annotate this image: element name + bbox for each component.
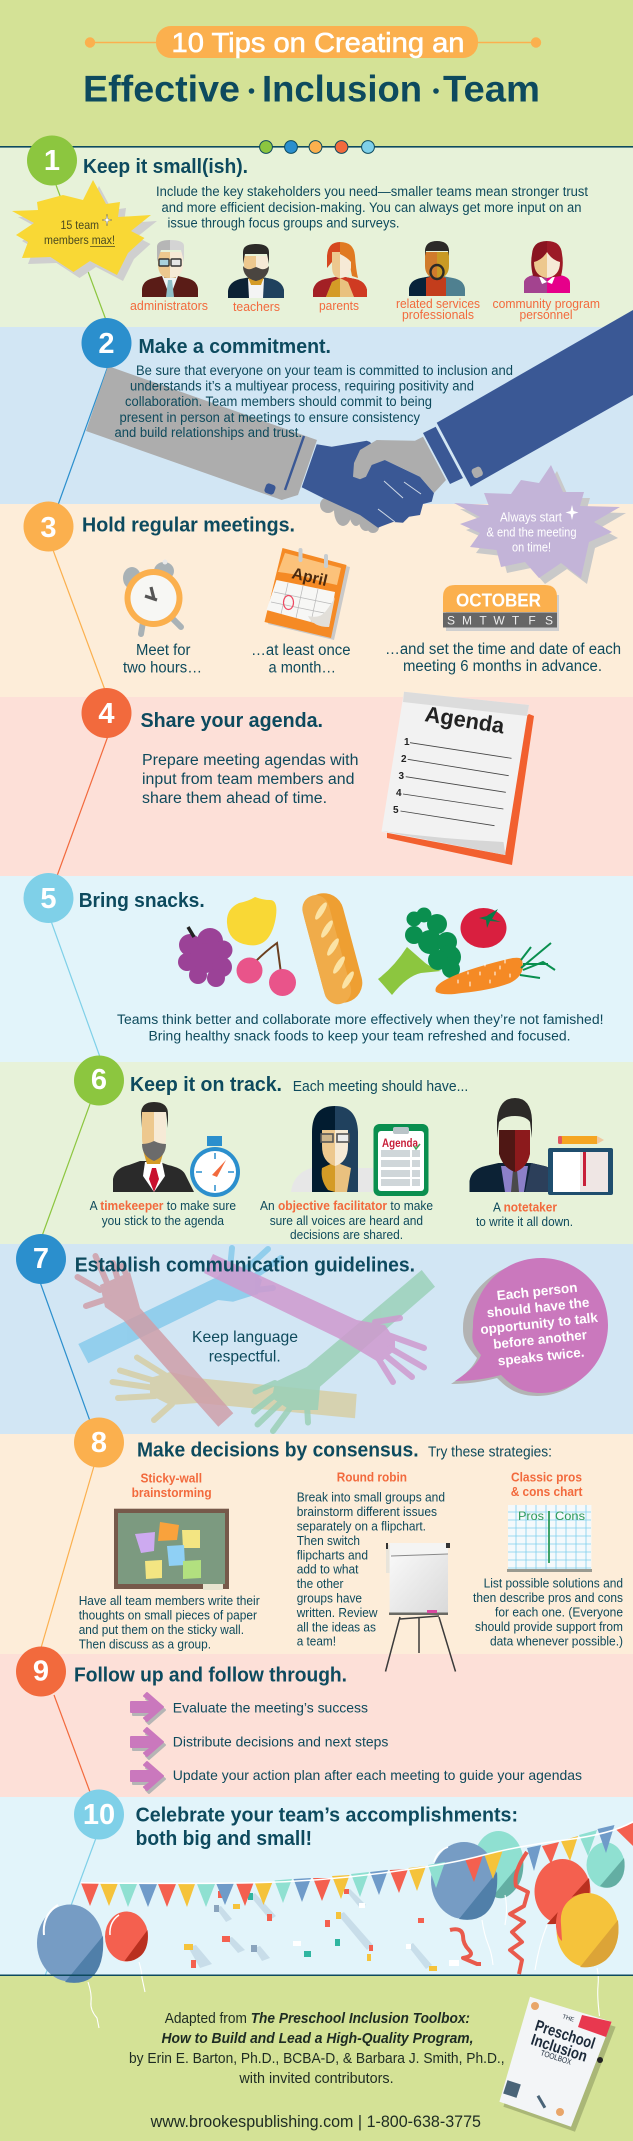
round robin body text: a team! bbox=[297, 1634, 336, 1648]
left red balloon bbox=[105, 1912, 148, 1962]
section 6 captions: you stick to the agenda bbox=[102, 1213, 225, 1228]
starburst callout: 15 team members max: members max! bbox=[44, 233, 115, 247]
big blue balloon bbox=[431, 1842, 497, 1920]
section 6 captions bbox=[90, 1198, 573, 1242]
speech bubble callout bbox=[451, 1258, 608, 1396]
sticky-wall body text: Then discuss as a group. bbox=[79, 1636, 211, 1652]
main title bbox=[83, 68, 540, 110]
strategy headings: Sticky-wall bbox=[140, 1470, 202, 1486]
title banner: 10 Tips on Creating an bbox=[172, 27, 464, 58]
icon: grapes bbox=[178, 927, 232, 987]
starburst callout: always start and end on time: & end the meeting bbox=[486, 524, 576, 540]
arm: purple bbox=[204, 1254, 424, 1382]
numbered circle 4: 4 bbox=[98, 698, 115, 730]
round robin body text: flipcharts and bbox=[297, 1548, 368, 1562]
section 5 background bbox=[0, 876, 633, 1062]
section 7: reaching arms illustration bbox=[78, 1248, 435, 1431]
icon: October calendar strip: T bbox=[512, 614, 520, 628]
round robin body text: brainstorm different issues bbox=[297, 1504, 437, 1519]
section 1: keep it small bbox=[12, 156, 600, 322]
icon: agenda notepad: 1 bbox=[404, 737, 410, 748]
round robin body text: separately on a flipchart. bbox=[297, 1518, 426, 1534]
round robin body text: written. Review bbox=[296, 1605, 378, 1620]
numbered circle 7 bbox=[16, 1234, 66, 1284]
left big blue balloon bbox=[37, 1904, 103, 1983]
numbered circle 6: 6 bbox=[91, 1064, 107, 1096]
strategy headings: Round robin bbox=[337, 1470, 407, 1484]
numbered circle 2 bbox=[82, 318, 132, 368]
footer website and phone: www.brookespublishing.com | 1-800-638-3775 bbox=[150, 2112, 481, 2131]
section 9 background bbox=[0, 1654, 633, 1797]
sticky-wall body text: Have all team members write their bbox=[79, 1593, 260, 1608]
section 5 body text: Teams think better and collaborate more effectively when they’re not famished! bbox=[117, 1012, 604, 1027]
pros and cons body text: should provide support from bbox=[475, 1619, 623, 1634]
starburst callout: 15 team members max: 15 team bbox=[60, 218, 99, 232]
section 10 background bbox=[0, 1797, 633, 1975]
body text 2: and build relationships and trust. bbox=[114, 425, 302, 440]
body text 2: collaboration. Team members should commit to being bbox=[125, 394, 432, 409]
strategy headings: Classic pros bbox=[511, 1470, 582, 1484]
section 8 heading: Try these strategies: bbox=[428, 1444, 552, 1460]
main title: Effective bbox=[83, 68, 240, 110]
gray fingers bbox=[320, 494, 379, 533]
speech bubble callout: opportunity to talk bbox=[480, 1310, 599, 1337]
section 5 body text bbox=[117, 1012, 604, 1044]
gray hand bbox=[353, 437, 446, 493]
book cover: TOOLBOX bbox=[539, 2048, 573, 2067]
left balloon strings bbox=[88, 1962, 145, 2028]
numbered circle 2: 2 bbox=[98, 328, 115, 360]
speech bubble callout: Each person bbox=[496, 1280, 578, 1303]
section 3 captions: Meet for bbox=[136, 642, 190, 659]
numbered circle 8: 8 bbox=[91, 1427, 107, 1459]
section 9 heading: Follow up and follow through. bbox=[74, 1664, 347, 1686]
section 3 captions: a month… bbox=[268, 660, 336, 676]
section 6 captions: An objective facilitator to make bbox=[260, 1198, 433, 1213]
section 4 heading: Share your agenda. bbox=[140, 710, 323, 732]
section 5 body text: Bring healthy snack foods to keep your team refreshed and focused. bbox=[148, 1028, 570, 1044]
strategy headings: brainstorming bbox=[132, 1485, 212, 1500]
arrow list text: Distribute decisions and next steps bbox=[173, 1734, 388, 1750]
section 5 heading: Bring snacks. bbox=[79, 890, 205, 912]
book cover: Preschool bbox=[533, 2018, 597, 2053]
footer citation text: How to Build and Lead a High-Quality Program, bbox=[162, 2030, 474, 2047]
arm: pink-red bbox=[78, 1256, 233, 1427]
pros and cons body text bbox=[473, 1576, 623, 1648]
icon: October calendar strip: S bbox=[545, 614, 553, 628]
icon: sticky-note board bbox=[114, 1509, 229, 1590]
numbered circle 5: 5 bbox=[40, 883, 57, 915]
body text 2: understands it’s a multiyear process, requiring positivity and bbox=[130, 378, 474, 394]
section 3 captions: two hours… bbox=[123, 660, 202, 676]
icon: pros and cons grid: Pros bbox=[518, 1509, 544, 1523]
icon: pros and cons grid: Cons bbox=[555, 1509, 585, 1523]
numbered circle 3: 3 bbox=[40, 512, 57, 544]
balloons right cluster bbox=[431, 1831, 625, 2016]
icon: community program personnel bbox=[524, 241, 570, 293]
icon: agenda notepad: Agenda bbox=[423, 701, 507, 739]
arrow list text: Evaluate the meeting’s success bbox=[173, 1700, 368, 1716]
role labels: administrators bbox=[130, 299, 208, 313]
icon: October calendar strip: F bbox=[528, 614, 536, 628]
numbered circle 7: 7 bbox=[33, 1243, 49, 1275]
role labels: professionals bbox=[402, 308, 474, 322]
main title: Team bbox=[443, 68, 540, 110]
balloons left pair bbox=[37, 1904, 148, 2028]
numbered circle 10: 10 bbox=[83, 1799, 115, 1831]
sticky-wall body text: and put them on the sticky wall. bbox=[79, 1622, 244, 1637]
section 2: handshake illustration bbox=[86, 310, 633, 533]
numbered circle 1 bbox=[27, 136, 77, 186]
section 10 heading: Celebrate your team’s accomplishments: bbox=[136, 1804, 518, 1826]
section 3 captions: meeting 6 months in advance. bbox=[403, 658, 602, 675]
section 7 body text: Keep language bbox=[192, 1329, 298, 1346]
icon: tomato bbox=[460, 908, 506, 948]
arrow 3 bbox=[131, 1762, 165, 1793]
numbered circle 8 bbox=[74, 1418, 124, 1468]
section 8 heading: Make decisions by consensus. bbox=[137, 1440, 419, 1462]
heading 2: Make a commitment. bbox=[138, 336, 331, 358]
connector lines between numbered circles bbox=[40, 185, 108, 1976]
section 10 heading: both big and small! bbox=[136, 1828, 312, 1850]
body text 1 bbox=[156, 184, 588, 230]
arrow 1 bbox=[131, 1693, 165, 1724]
numbered circle 4 bbox=[82, 688, 132, 738]
pros and cons body text: then describe pros and cons bbox=[473, 1590, 623, 1605]
book cover: Inclusion bbox=[529, 2032, 589, 2066]
numbered circle 6 bbox=[74, 1056, 124, 1106]
mint small balloon bbox=[586, 1842, 625, 1888]
icon: October calendar strip bbox=[443, 585, 559, 631]
section 6 heading: Each meeting should have... bbox=[293, 1079, 468, 1095]
arm: tan bbox=[112, 1358, 357, 1420]
footer citation text: Adapted from The Preschool Inclusion Toolbox: bbox=[165, 2010, 470, 2027]
icon: alarm clock bbox=[123, 560, 182, 634]
icon: teacher bbox=[228, 244, 284, 298]
section 10 heading bbox=[136, 1804, 518, 1850]
icon: April calendar bbox=[264, 548, 350, 640]
bunting string and flags bbox=[81, 1822, 633, 1907]
gray sleeve bbox=[86, 366, 317, 500]
icon: agenda notepad: 2 bbox=[401, 754, 407, 765]
role labels: personnel bbox=[520, 308, 572, 322]
icon: pear bbox=[227, 897, 276, 945]
icon: cherries bbox=[236, 943, 296, 996]
speech bubble callout: should have the bbox=[486, 1295, 591, 1320]
round robin body text bbox=[296, 1490, 445, 1648]
body text 2 bbox=[114, 363, 513, 440]
round robin body text: the other bbox=[297, 1576, 344, 1591]
sticky-wall body text bbox=[79, 1593, 260, 1652]
section 4 body text bbox=[142, 752, 358, 807]
section 7 body text: respectful. bbox=[209, 1348, 281, 1366]
sticky-wall body text: thoughts on small pieces of paper bbox=[79, 1608, 258, 1622]
red balloon bbox=[534, 1859, 590, 1924]
arm: green bbox=[254, 1270, 435, 1431]
section 6 heading bbox=[130, 1074, 468, 1096]
section 4 body text: Prepare meeting agendas with bbox=[142, 752, 358, 769]
title banner bbox=[85, 26, 541, 58]
section 4 background bbox=[0, 697, 633, 876]
icon: carrot bbox=[435, 943, 555, 994]
arrow list text: Update your action plan after each meeting to guide your agendas bbox=[173, 1767, 582, 1783]
arrow list text bbox=[173, 1700, 582, 1783]
section 7 background bbox=[0, 1244, 633, 1434]
icon: agenda notepad: 4 bbox=[396, 788, 402, 799]
icon: October calendar strip: OCTOBER bbox=[456, 590, 541, 610]
balloon strings bbox=[482, 1895, 600, 2016]
numbered circle 9: 9 bbox=[33, 1656, 49, 1688]
section 6 captions: to write it all down. bbox=[476, 1214, 573, 1229]
icon: facilitator with agenda clipboard: Agenda bbox=[382, 1136, 418, 1150]
strategy headings: & cons chart bbox=[511, 1484, 583, 1499]
icon: October calendar strip: T bbox=[479, 614, 487, 628]
numbered circle 10 bbox=[74, 1790, 124, 1840]
starburst callout: always start and end on time: Always start bbox=[500, 510, 562, 524]
arrow 2 bbox=[131, 1728, 165, 1759]
icon: related services professional bbox=[409, 241, 465, 296]
mint balloon bbox=[474, 1831, 524, 1898]
round robin body text: add to what bbox=[297, 1562, 359, 1576]
header divider with five dots bbox=[0, 141, 633, 153]
section 8 background bbox=[0, 1434, 633, 1654]
section 3 heading: Hold regular meetings. bbox=[82, 514, 295, 536]
section 4 body text: input from team members and bbox=[142, 771, 354, 788]
confetti bbox=[184, 1889, 459, 1971]
icon: pros and cons grid bbox=[507, 1505, 592, 1572]
icon: timekeeper with stopwatch bbox=[113, 1102, 240, 1197]
body text 2: present in person at meetings to ensure consistency bbox=[120, 410, 420, 425]
yellow balloon bbox=[556, 1893, 618, 1967]
starburst callout: always start and end on time: on time! bbox=[512, 540, 551, 554]
section 3 background bbox=[0, 504, 633, 697]
round robin body text: Break into small groups and bbox=[297, 1490, 445, 1504]
icon: baguette bbox=[299, 889, 367, 1007]
pros and cons body text: data whenever possible.) bbox=[490, 1634, 623, 1648]
section 3 captions: …and set the time and date of each bbox=[385, 641, 621, 658]
blue hand bbox=[302, 441, 434, 528]
footer divider line bbox=[0, 1974, 633, 1976]
red streamers bbox=[450, 1852, 528, 1974]
section 6 background bbox=[0, 1062, 633, 1244]
follow-up arrow list bbox=[131, 1693, 582, 1793]
section 3 captions bbox=[123, 641, 621, 676]
footer citation text bbox=[129, 2010, 505, 2087]
role labels: teachers bbox=[233, 300, 280, 314]
icon: October calendar strip: W bbox=[493, 614, 505, 628]
icon: flipchart bbox=[386, 1543, 456, 1672]
book cover bbox=[499, 1997, 616, 2132]
section 6 captions: decisions are shared. bbox=[290, 1227, 403, 1242]
starburst callout: 15 team members max bbox=[12, 180, 157, 281]
section 7 body text bbox=[192, 1329, 298, 1366]
numbered circle 1: 1 bbox=[44, 145, 60, 177]
main title: Inclusion bbox=[262, 68, 422, 110]
section 6 captions: sure all voices are heard and bbox=[270, 1213, 423, 1228]
icon: administrator bbox=[142, 240, 198, 297]
round robin body text: groups have bbox=[297, 1590, 362, 1606]
body text 1: Include the key stakeholders you need—smaller teams mean stronger trust bbox=[156, 184, 588, 199]
book cover: THE bbox=[561, 2014, 575, 2024]
footer citation text: with invited contributors. bbox=[238, 2070, 394, 2087]
body text 1: issue through focus groups and surveys. bbox=[168, 216, 400, 230]
role labels: community program bbox=[492, 297, 600, 311]
section 6 captions: A notetaker bbox=[493, 1200, 557, 1214]
footer citation text: by Erin E. Barton, Ph.D., BCBA-D, & Barbara J. Smith, Ph.D., bbox=[129, 2050, 505, 2067]
icon: agenda notepad: 5 bbox=[393, 805, 399, 816]
speech bubble callout: before another bbox=[493, 1327, 588, 1352]
role labels: parents bbox=[319, 299, 359, 313]
role labels: related services bbox=[396, 297, 480, 311]
numbered circle 5 bbox=[24, 873, 74, 923]
pros and cons body text: List possible solutions and bbox=[484, 1576, 623, 1590]
blue sleeve bbox=[437, 310, 633, 487]
speech bubble callout: speaks twice. bbox=[497, 1344, 585, 1369]
numbered circle 3 bbox=[24, 502, 74, 552]
arm: light blue bbox=[78, 1248, 281, 1363]
icon: October calendar strip: S bbox=[447, 614, 455, 628]
icon: notetaker with notebook bbox=[470, 1098, 613, 1195]
section 4 body text: share them ahead of time. bbox=[142, 790, 327, 807]
heading 1: Keep it small(ish). bbox=[83, 156, 248, 178]
pros and cons body text: for each one. (Everyone bbox=[495, 1604, 623, 1620]
section 3 captions: …at least once bbox=[251, 642, 350, 659]
icon: April calendar: April bbox=[290, 565, 329, 590]
section 1 background bbox=[0, 147, 633, 327]
icon: October calendar strip: M bbox=[462, 614, 472, 628]
section 7 heading: Establish communication guidelines. bbox=[75, 1254, 415, 1276]
icon: broccoli bbox=[378, 908, 461, 995]
starburst callout: always start and end on time bbox=[454, 465, 626, 584]
header band bbox=[0, 0, 633, 147]
round robin body text: all the ideas as bbox=[297, 1620, 376, 1634]
numbered circle 9 bbox=[16, 1646, 66, 1696]
section 6 heading: Keep it on track. bbox=[130, 1074, 282, 1096]
footer band bbox=[0, 1975, 633, 2141]
icon: agenda notepad bbox=[382, 692, 534, 865]
role labels bbox=[130, 297, 600, 322]
round robin body text: Then switch bbox=[297, 1533, 360, 1548]
icon: facilitator with agenda clipboard bbox=[291, 1106, 428, 1196]
section 2 background bbox=[0, 327, 633, 504]
icon: agenda notepad: 3 bbox=[398, 771, 404, 782]
strategy headings bbox=[132, 1470, 583, 1500]
body text 2: Be sure that everyone on your team is committed to inclusion and bbox=[136, 363, 513, 378]
icon: parent bbox=[313, 242, 367, 297]
section 6 captions: A timekeeper to make sure bbox=[90, 1198, 236, 1213]
body text 1: and more efficient decision-making. You can always get more input on an bbox=[162, 200, 582, 215]
